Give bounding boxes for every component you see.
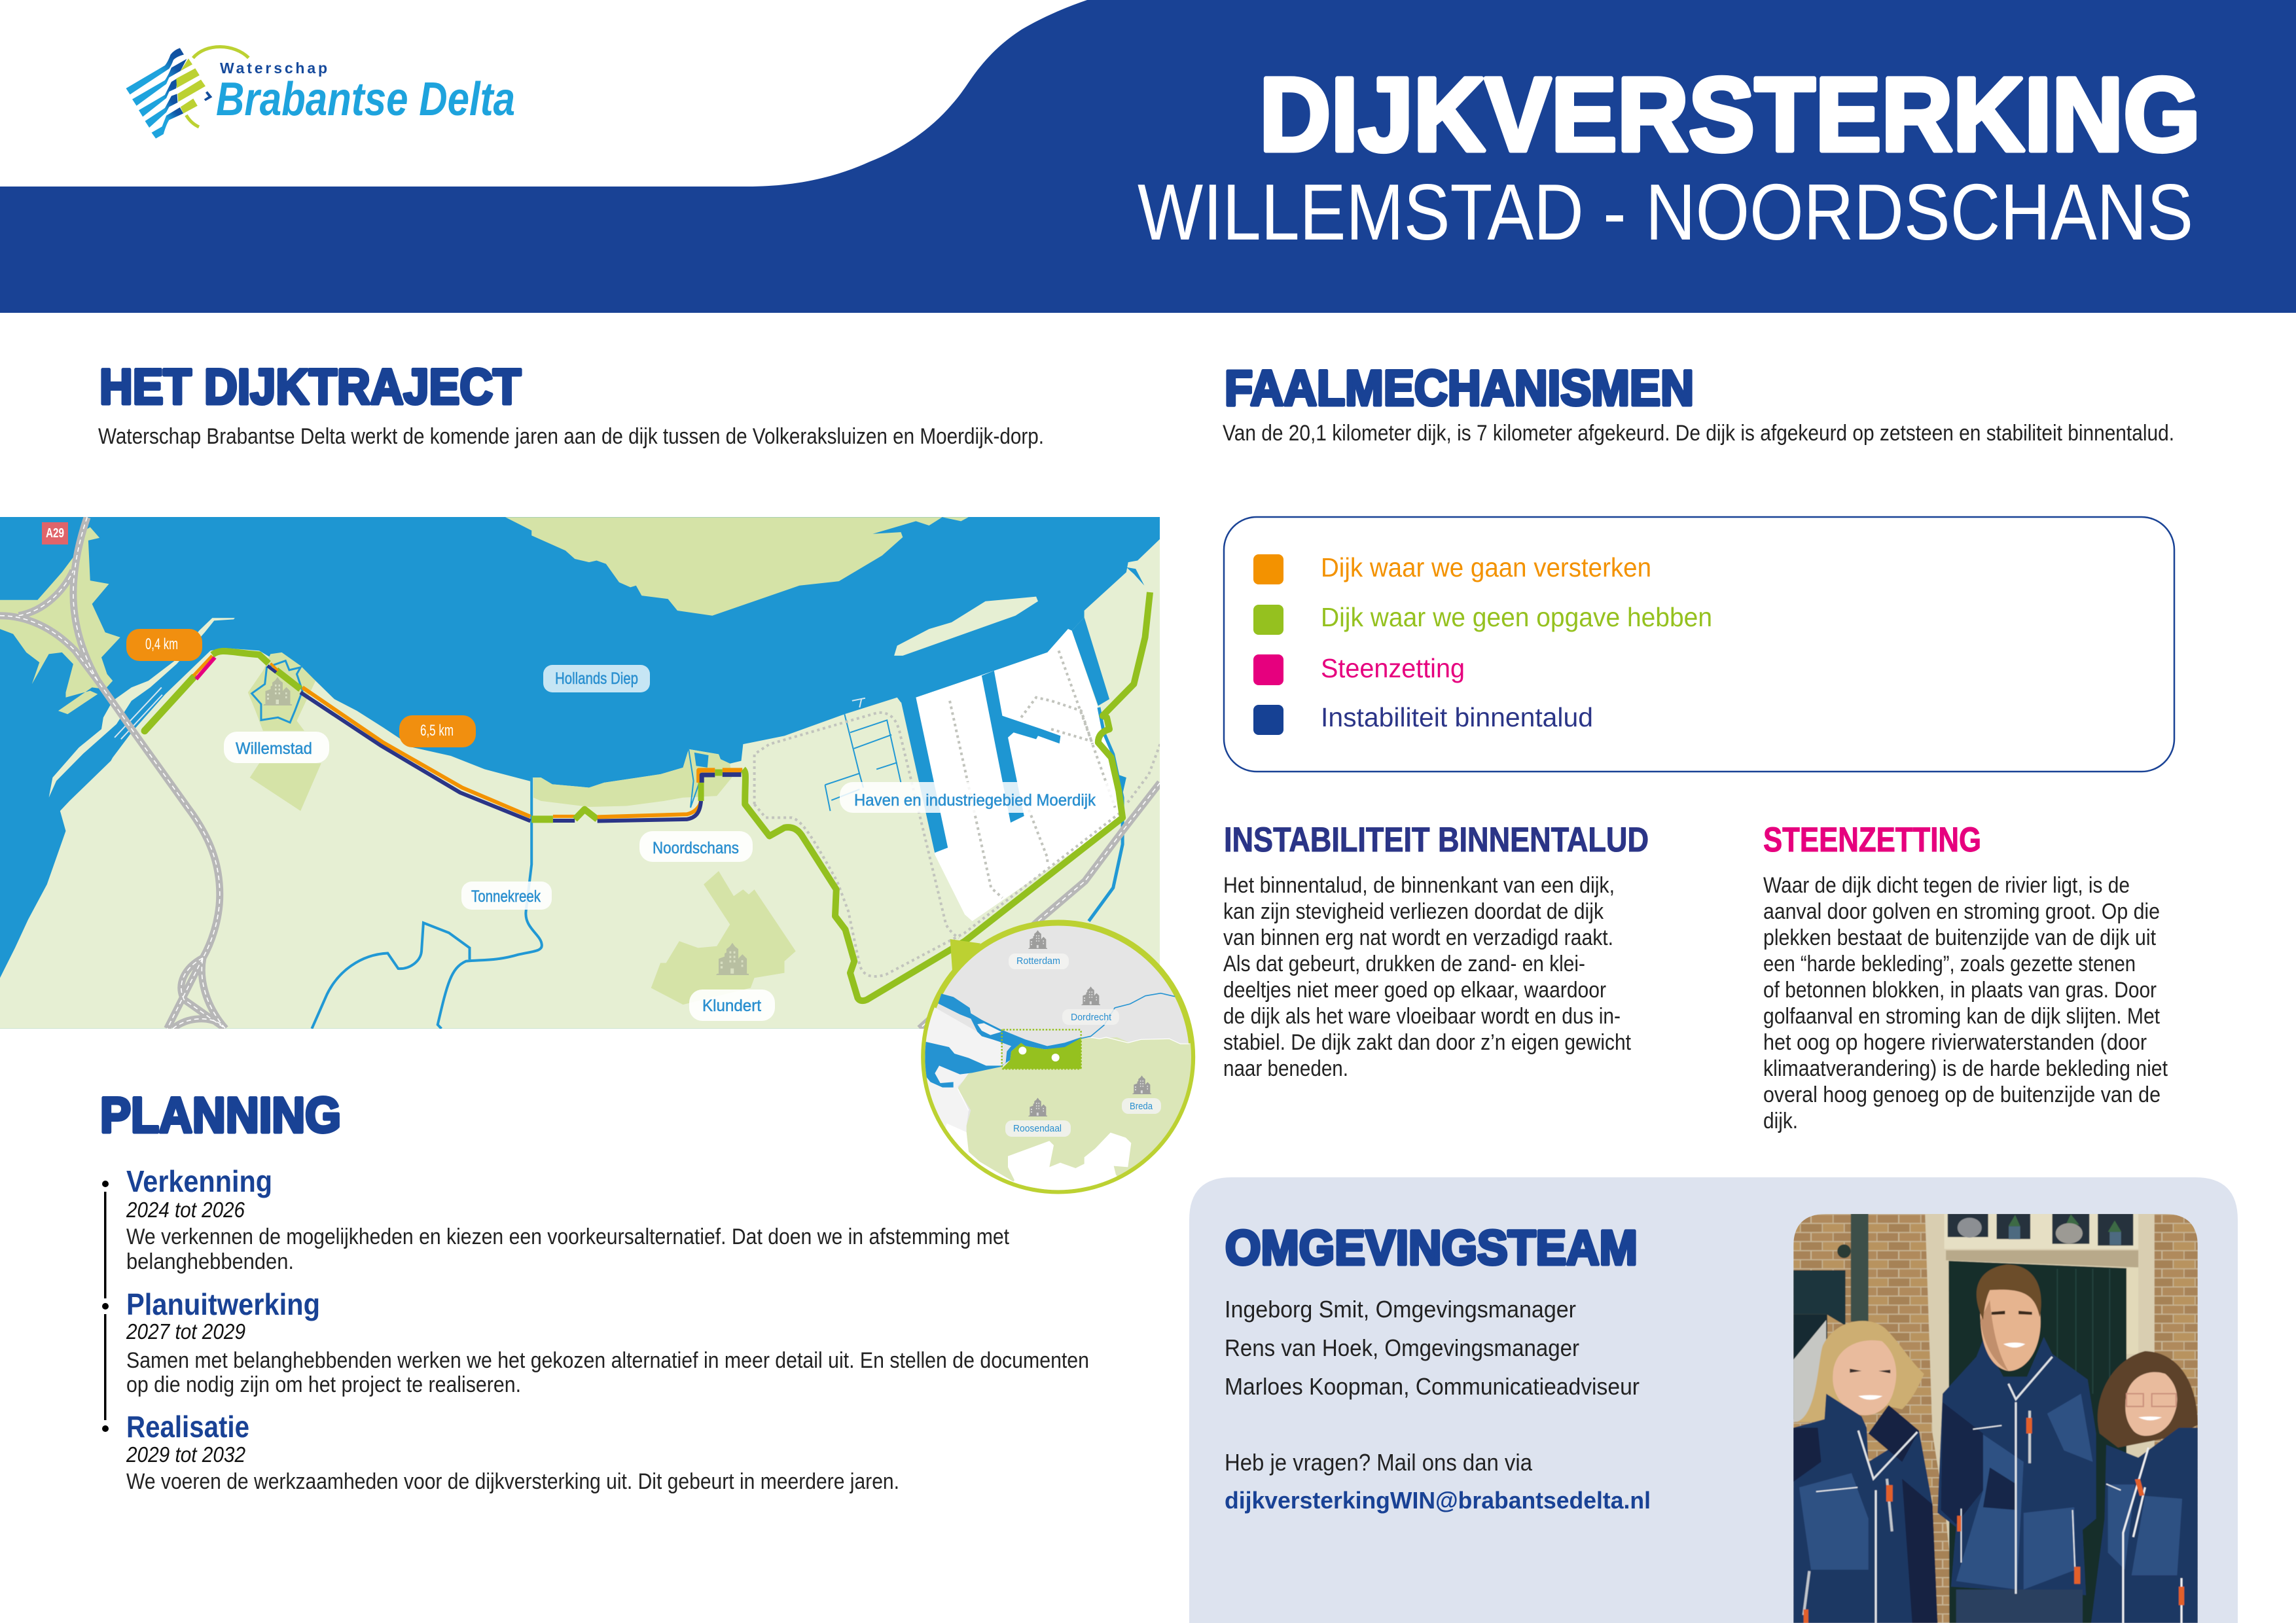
label: Tonnekreek: Tonnekreek — [471, 887, 541, 906]
main land — [0, 539, 1160, 1029]
inset label: Roosendaal: Roosendaal — [1013, 1123, 1062, 1134]
text: steenzetting: Waar de dijk dicht tegen de rivier ligt, is de — [1763, 873, 2130, 898]
phase: planuitwerking: Samen met belanghebbenden werken we het gekozen alternatief in meer detail uit. En stellen de documenten — [126, 1348, 1089, 1373]
phase: verkenning: We verkennen de mogelijkheden en kiezen een voorkeursalternatief. Dat doen we in afstemming met — [126, 1224, 1009, 1249]
legend text pink: Steenzetting — [1321, 653, 1465, 683]
team names: Ingeborg Smit, Omgevingsmanager — [1225, 1296, 1576, 1323]
inset cities — [1028, 930, 1152, 1116]
inset label: Roosendaal — [1005, 1120, 1071, 1137]
label: Willemstad: Willemstad — [236, 740, 312, 758]
team names: Marloes Koopman, Communicatieadviseur — [1225, 1373, 1640, 1400]
contact question: Heb je vragen? Mail ons dan via — [1225, 1449, 1533, 1476]
legend swatch green — [1253, 605, 1283, 635]
label: Noordschans — [639, 831, 753, 862]
legend text green: Dijk waar we geen opgave hebben — [1321, 602, 1712, 632]
phase: planuitwerking: 2027 tot 2029 — [126, 1319, 245, 1344]
label: Haven en industriegebied Moerdijk: Haven en industriegebied Moerdijk — [854, 791, 1096, 810]
dike segments — [145, 592, 1150, 1001]
phase: verkenning: Verkenning — [126, 1164, 272, 1198]
door — [1948, 1261, 2126, 1623]
label: A29: A29 — [46, 526, 64, 541]
label: Klundert: Klundert — [702, 997, 761, 1015]
callout: 0,4 km: 0,4 km — [145, 635, 178, 653]
inset pointer and ring — [924, 923, 1193, 1191]
person: woman left — [1796, 1321, 1924, 1422]
label: Willemstad — [224, 732, 329, 763]
phase: verkenning: belanghebbenden. — [126, 1249, 294, 1274]
text: instabiliteit binnentalud — [1223, 873, 1631, 1081]
panel: omgevingsteam — [1189, 1177, 2238, 1623]
inset label: Dordrecht — [1062, 1009, 1119, 1025]
team names: Rens van Hoek, Omgevingsmanager — [1225, 1334, 1579, 1361]
label: A29 — [42, 522, 68, 544]
text: steenzetting: plekken bestaat de buitenzijde van de dijk uit — [1763, 925, 2156, 950]
north bank — [505, 517, 969, 616]
text: steenzetting: een “harde bekleding”, zoals gezette stenen — [1763, 952, 2136, 976]
port area — [916, 629, 1122, 921]
phase: realisatie: 2029 tot 2032 — [126, 1442, 245, 1467]
logo text: Brabantse Delta: Brabantse Delta — [216, 73, 515, 126]
person: man — [1937, 1337, 2096, 1596]
legend text navy: Instabiliteit binnentalud — [1321, 702, 1593, 732]
shutter and pipe — [1793, 1270, 1846, 1326]
harbour basins — [694, 567, 1144, 853]
label: Tonnekreek — [461, 882, 552, 910]
text: steenzetting: golfaanval en stroming kan de dijk slijten. Met — [1763, 1004, 2160, 1029]
text: instabiliteit binnentalud: Als dat gebeurt, drukken de zand- en klei- — [1223, 952, 1585, 976]
phase: verkenning: 2024 tot 2026 — [126, 1198, 245, 1222]
label: Noordschans: Noordschans — [653, 839, 739, 857]
text: instabiliteit binnentalud: stabiel. De dijk zakt dan door z’n eigen gewicht — [1223, 1030, 1631, 1055]
label: Hollands Diep — [543, 665, 650, 692]
inset locator map — [916, 923, 1196, 1209]
text: steenzetting — [1763, 873, 2168, 1133]
inset label: Rotterdam — [1009, 954, 1069, 969]
text: steenzetting: overal hoog genoeg op de buitenzijde van de — [1763, 1082, 2161, 1107]
title: DIJKVERSTERKING — [1259, 56, 2200, 173]
phase: planuitwerking — [126, 1287, 1089, 1397]
intro text: faalmechanismen: Van de 20,1 kilometer dijk, is 7 kilometer afgekeurd. De dijk is afgekeurd op zetsteen en stabiliteit binnentalud. — [1223, 421, 2174, 446]
lock strip — [49, 618, 235, 798]
callout: 6,5 km: 6,5 km — [420, 722, 454, 740]
heading: het dijktraject: HET DIJKTRAJECT — [99, 359, 521, 415]
legend swatch pink — [1253, 654, 1283, 685]
text: instabiliteit binnentalud: naar beneden. — [1223, 1056, 1348, 1081]
label: Hollands Diep: Hollands Diep — [555, 669, 638, 688]
phase: planuitwerking: op die nodig zijn om het project te realiseren. — [126, 1372, 521, 1397]
text: instabiliteit binnentalud: de dijk als het ware vloeibaar wordt en dus in- — [1223, 1004, 1621, 1029]
inset label: Dordrecht: Dordrecht — [1071, 1012, 1112, 1023]
map — [0, 517, 1160, 1029]
logo — [126, 46, 515, 139]
dotted roads — [755, 651, 1160, 976]
callout: 6,5 km — [399, 715, 476, 747]
icon: town Willemstad — [263, 677, 293, 705]
phase: realisatie — [126, 1410, 899, 1494]
legend text orange: Dijk waar we gaan versterken — [1321, 552, 1651, 582]
legend — [1224, 517, 2174, 772]
peninsula at A29 — [0, 527, 120, 714]
timeline — [102, 1181, 109, 1432]
inset label: Breda: Breda — [1130, 1101, 1153, 1112]
label: Klundert — [689, 990, 775, 1021]
heading: planning: PLANNING — [100, 1088, 341, 1143]
text: steenzetting: dijk. — [1763, 1109, 1798, 1133]
island — [894, 597, 1038, 656]
roads — [0, 517, 1160, 1029]
text: steenzetting: klimaatverandering) is de harde bekleding niet — [1763, 1056, 2168, 1081]
inset geography — [916, 993, 1196, 1209]
header band — [0, 0, 2296, 313]
phase: verkenning — [126, 1164, 1009, 1274]
inset label: Rotterdam: Rotterdam — [1016, 955, 1060, 967]
intro text: dijktraject: Waterschap Brabantse Delta werkt de komende jaren aan de dijk tussen de Volkeraksluizen en Moerdijk-dorp. — [98, 424, 1044, 449]
text: steenzetting: het oog op hogere rivierwaterstanden (door — [1763, 1030, 2147, 1055]
heading: instabiliteit binnentalud: INSTABILITEIT BINNENTALUD — [1224, 821, 1649, 859]
contact email: dijkversterkingWIN@brabantsedelta.nl — [1225, 1487, 1651, 1514]
phase: realisatie: We voeren de werkzaamheden voor de dijkversterking uit. Dit gebeurt in meerdere jaren. — [126, 1469, 899, 1494]
team photo — [1793, 1214, 2198, 1623]
logo mark — [126, 46, 249, 139]
heading: steenzetting: STEENZETTING — [1763, 821, 1981, 859]
phase: realisatie: Realisatie — [126, 1410, 249, 1444]
heading: omgevingsteam: OMGEVINGSTEAM — [1225, 1221, 1638, 1275]
text: instabiliteit binnentalud: Het binnentalud, de binnenkant van een dijk, — [1223, 873, 1615, 898]
text: steenzetting: aanval door golven en stroming groot. Op die — [1763, 899, 2160, 924]
icon: town Klundert — [716, 943, 749, 975]
heading: faalmechanismen: FAALMECHANISMEN — [1225, 361, 1694, 416]
locks — [115, 687, 865, 739]
legend swatch orange — [1253, 554, 1283, 584]
text: instabiliteit binnentalud: kan zijn stevigheid verliezen doordat de dijk — [1223, 899, 1604, 924]
team names — [1225, 1296, 1640, 1400]
text: instabiliteit binnentalud: deeltjes niet meer goed op elkaar, waardoor — [1223, 978, 1606, 1003]
callout: 0,4 km — [126, 629, 202, 661]
label: Haven en industriegebied Moerdijk — [840, 782, 1115, 813]
text: steenzetting: of betonnen blokken, in plaats van gras. Door — [1763, 978, 2157, 1003]
green parcels — [533, 749, 732, 807]
phase: planuitwerking: Planuitwerking — [126, 1287, 320, 1321]
person: woman right — [2098, 1351, 2198, 1448]
text: instabiliteit binnentalud: van binnen erg nat wordt en verzadigd raakt. — [1223, 925, 1613, 950]
logo text: Waterschap: Waterschap — [220, 60, 327, 77]
legend swatch navy — [1253, 705, 1283, 735]
inset label: Breda — [1122, 1098, 1161, 1114]
door frame — [1925, 1214, 2155, 1623]
water lines — [252, 661, 1122, 1029]
